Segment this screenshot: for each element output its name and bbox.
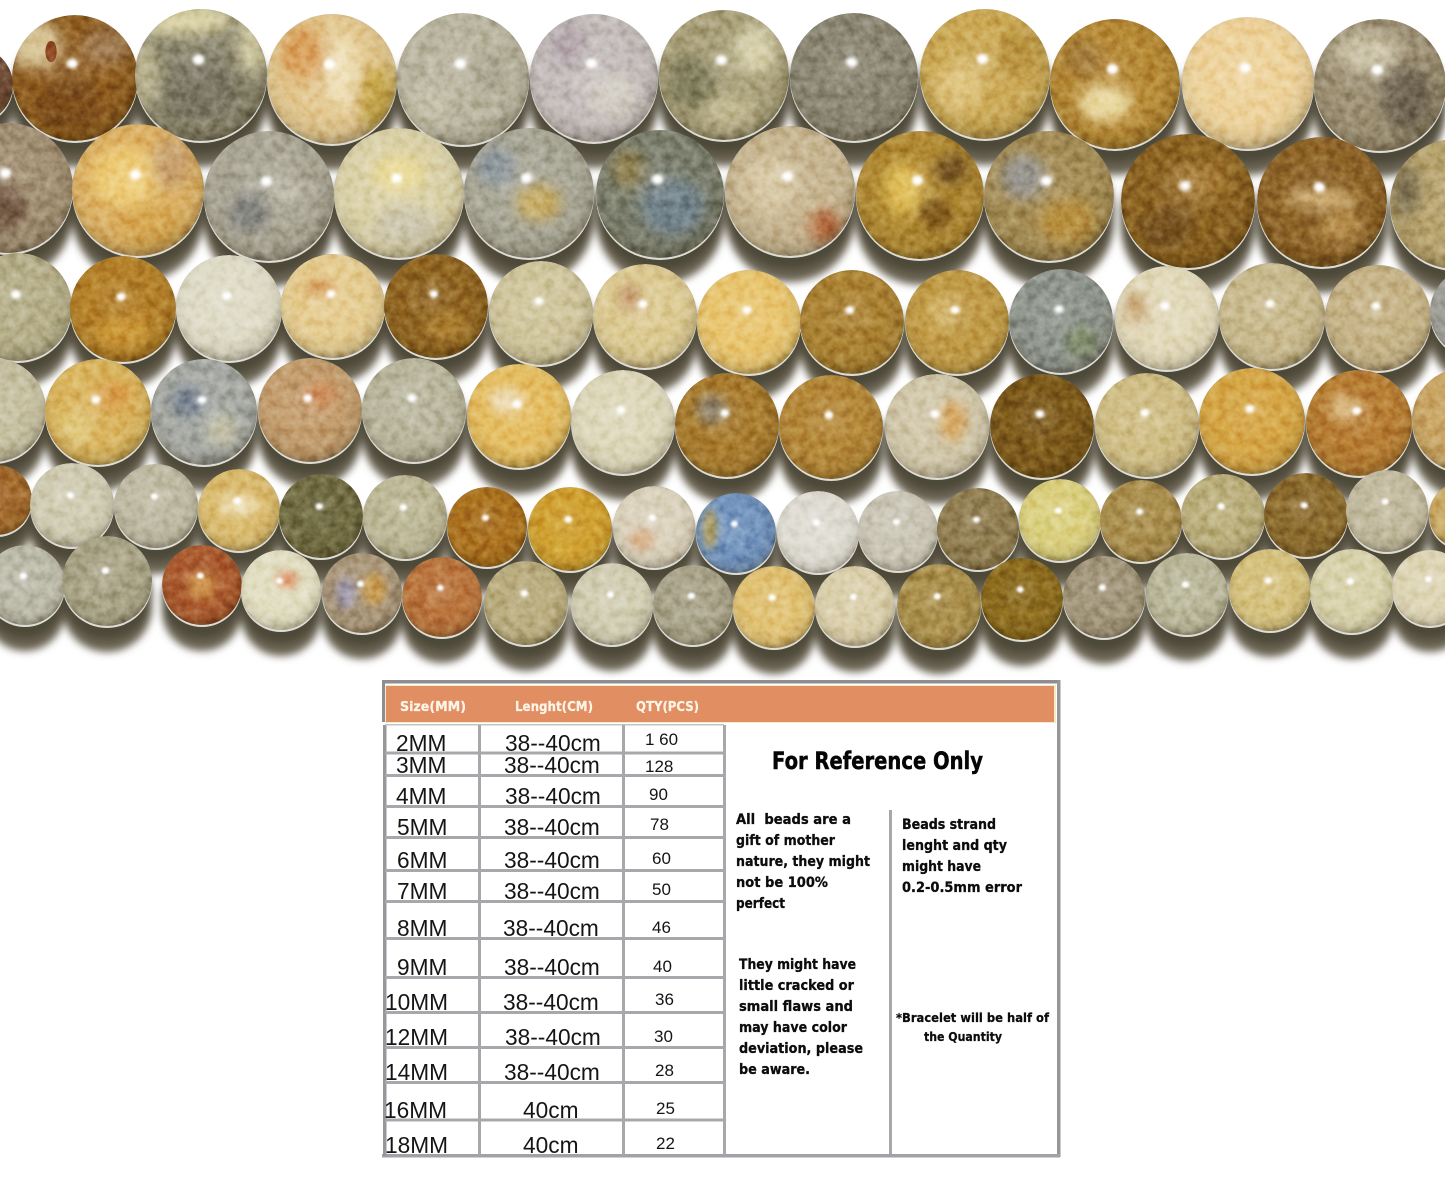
length column: 40cm xyxy=(523,1132,578,1158)
note: bracelet quantity: the Quantity xyxy=(924,1029,1002,1044)
note: bracelet quantity: *Bracelet will be half of xyxy=(896,1010,1050,1025)
length column: 38--40cm xyxy=(505,783,601,809)
quantity column: 90 xyxy=(649,785,668,804)
bead strand row 2 xyxy=(0,123,1445,269)
note: natural beads: not be 100% xyxy=(736,875,828,891)
note: strand length error: might have xyxy=(902,859,981,875)
quantity column: 30 xyxy=(654,1027,673,1046)
note: flaws and colour: small flaws and xyxy=(739,999,853,1015)
size column: 12MM xyxy=(385,1024,448,1050)
quantity column: 28 xyxy=(655,1061,674,1080)
length column: 40cm xyxy=(523,1097,578,1123)
size column: 2MM xyxy=(396,730,446,756)
header bar xyxy=(385,685,1056,723)
size column xyxy=(384,730,448,1158)
bead strand row 5 xyxy=(0,463,1445,573)
note: natural beads: nature, they might xyxy=(736,854,870,870)
quantity column: 128 xyxy=(645,757,673,776)
length column: 38--40cm xyxy=(503,915,599,941)
heading: for reference only: For Reference Only xyxy=(772,747,983,775)
note: strand length error: Beads strand xyxy=(902,817,996,833)
panel frame xyxy=(382,680,1060,1158)
length column: 38--40cm xyxy=(504,752,600,778)
size column: 8MM xyxy=(397,915,447,941)
column heading: quantity: QTY(PCS) xyxy=(636,700,699,715)
size column: 9MM xyxy=(397,954,447,980)
quantity column: 36 xyxy=(655,990,674,1009)
size column: 18MM xyxy=(385,1132,448,1158)
quantity column: 22 xyxy=(656,1134,675,1153)
length column xyxy=(503,730,601,1158)
note: strand length error xyxy=(902,817,1023,896)
note: flaws and colour: They might have xyxy=(739,957,856,973)
notes divider xyxy=(889,810,892,1154)
size column: 14MM xyxy=(385,1059,448,1085)
quantity column xyxy=(645,730,678,1153)
note: flaws and colour: be aware. xyxy=(739,1062,810,1078)
note: strand length error: lenght and qty xyxy=(902,838,1007,854)
length column: 38--40cm xyxy=(505,730,601,756)
quantity column: 46 xyxy=(652,918,671,937)
quantity column: 60 xyxy=(652,849,671,868)
size column: 16MM xyxy=(384,1097,447,1123)
size column: 3MM xyxy=(396,752,446,778)
length column: 38--40cm xyxy=(504,847,600,873)
quantity column: 50 xyxy=(652,880,671,899)
bead strand row 3 xyxy=(0,253,1445,374)
note: natural beads xyxy=(736,812,870,912)
note: natural beads: gift of mother xyxy=(736,833,836,849)
note: flaws and colour: may have color xyxy=(739,1020,848,1036)
note: bracelet quantity xyxy=(896,1010,1050,1044)
length column: 38--40cm xyxy=(504,878,600,904)
note: natural beads: perfect xyxy=(736,896,785,912)
size column: 6MM xyxy=(397,847,447,873)
length column: 38--40cm xyxy=(503,989,599,1015)
bead reflections xyxy=(0,11,1445,650)
note: flaws and colour xyxy=(739,957,863,1078)
length column: 38--40cm xyxy=(505,1024,601,1050)
quantity column: 78 xyxy=(650,815,669,834)
size column: 4MM xyxy=(396,783,446,809)
length column: 38--40cm xyxy=(504,1059,600,1085)
length column: 38--40cm xyxy=(504,954,600,980)
column heading: size: Size(MM) xyxy=(400,700,466,715)
table grid xyxy=(385,724,726,1155)
quantity column: 1 60 xyxy=(645,730,678,749)
note: strand length error: 0.2-0.5mm error xyxy=(902,880,1023,896)
note: flaws and colour: little cracked or xyxy=(739,978,855,994)
note: flaws and colour: deviation, please xyxy=(739,1041,863,1057)
size chart panel xyxy=(382,680,1060,1158)
size column: 7MM xyxy=(397,878,447,904)
quantity column: 40 xyxy=(653,957,672,976)
note: natural beads: All beads are a xyxy=(736,812,851,828)
size column: 10MM xyxy=(385,989,448,1015)
bead shadows xyxy=(0,23,1445,674)
column heading: length: Lenght(CM) xyxy=(515,700,593,715)
bead strand row 6 xyxy=(0,536,1445,648)
length column: 38--40cm xyxy=(504,814,600,840)
size column: 5MM xyxy=(397,814,447,840)
bead strand row 1 xyxy=(0,2,1445,151)
quantity column: 25 xyxy=(656,1099,675,1118)
bead strand row 4 xyxy=(0,358,1445,479)
